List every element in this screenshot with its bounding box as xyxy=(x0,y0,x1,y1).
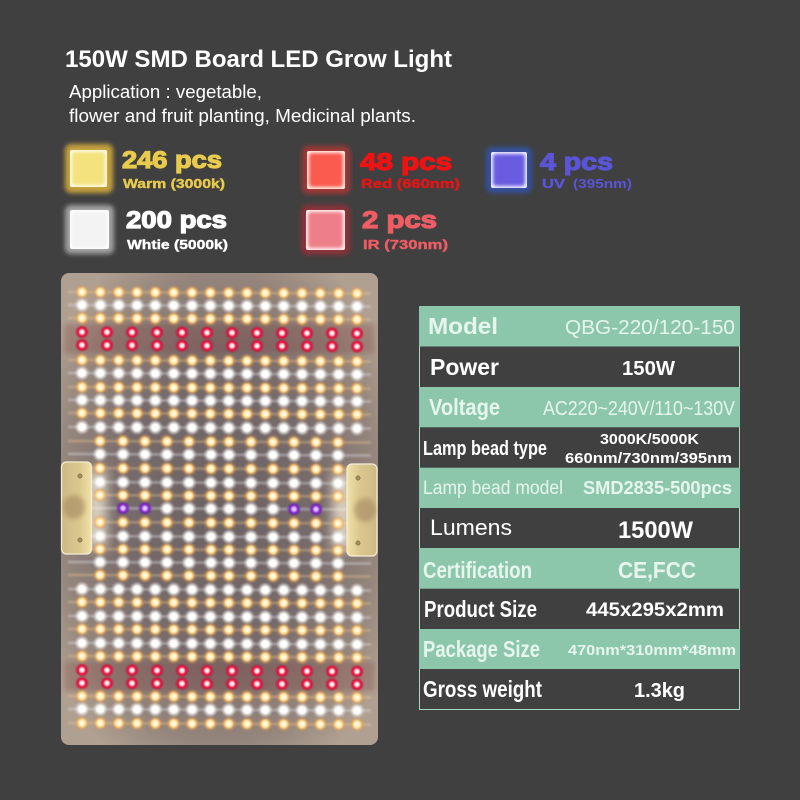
legend item: warm: 246 pcs xyxy=(122,147,222,174)
legend item: UV: (395nm) xyxy=(573,176,632,191)
row: voltage: Voltage xyxy=(429,394,500,420)
legend item: red: Red (660nm) xyxy=(361,176,460,191)
row: gross weight xyxy=(423,676,685,702)
row: lamp bead model: SMD2835-500pcs xyxy=(583,478,732,498)
row: model: Model xyxy=(428,313,498,339)
warm LEDs: bottom band xyxy=(74,594,365,732)
row light streaks xyxy=(68,291,371,726)
row: lamp bead type xyxy=(423,431,732,467)
row: package size xyxy=(423,636,736,662)
row: lumens: 1500W xyxy=(618,517,693,544)
table rows background xyxy=(419,306,740,710)
row: certification xyxy=(423,557,696,583)
application text: Application : vegetable, xyxy=(69,82,262,102)
red zones xyxy=(64,324,375,691)
row: gross weight: 1.3kg xyxy=(634,680,685,702)
application text xyxy=(69,82,416,126)
LED grid xyxy=(74,284,365,732)
UV LEDs xyxy=(116,501,323,516)
left handle bracket xyxy=(62,462,92,554)
row: lumens: Lumens xyxy=(430,515,512,540)
row: lumens xyxy=(430,515,693,544)
application text: flower and fruit planting, Medicinal plants. xyxy=(69,106,416,126)
row: power: Power xyxy=(430,354,499,380)
row: model: QBG-220/120-150 xyxy=(565,317,735,339)
row: lamp bead type: 660nm/730nm/395nm xyxy=(565,450,732,467)
row: power: 150W xyxy=(622,358,675,380)
row: certification: Certification xyxy=(423,557,532,583)
white LEDs: bottom band xyxy=(74,581,365,718)
warm LEDs: top band xyxy=(74,284,365,422)
row: lamp bead type: 3000K/5000K xyxy=(600,431,699,448)
row: power xyxy=(430,354,675,380)
red LEDs: top pair xyxy=(75,325,364,353)
row: product size xyxy=(424,596,724,622)
row: voltage: AC220~240V/110~130V xyxy=(543,398,736,420)
handle glow xyxy=(88,470,351,550)
legend item: red xyxy=(302,146,460,194)
right handle bracket xyxy=(347,464,377,556)
legend item: IR: 2 pcs xyxy=(362,207,437,234)
legend item: IR xyxy=(301,205,448,255)
row: product size: Product Size xyxy=(424,596,537,622)
legend item: white xyxy=(65,205,228,254)
row: package size: 470nm*310mm*48mm xyxy=(568,642,736,659)
row: model xyxy=(428,313,735,339)
row: lamp bead type: Lamp bead type xyxy=(423,438,547,460)
legend item: warm xyxy=(65,144,225,193)
white LEDs: top band xyxy=(74,297,365,436)
legend: LED bead counts xyxy=(65,144,632,255)
row: certification: CE,FCC xyxy=(618,557,696,583)
title: 150W SMD Board LED Grow Light xyxy=(65,46,452,73)
legend item: UV: 4 pcs xyxy=(540,149,613,176)
legend item: white: Whtie (5000k) xyxy=(127,237,228,252)
warm LEDs: middle band xyxy=(92,433,346,584)
legend item: IR: IR (730nm) xyxy=(363,237,448,252)
row: lamp bead model xyxy=(423,478,732,499)
legend item: red: 48 pcs xyxy=(360,149,452,176)
legend item: warm: Warm (3000k) xyxy=(123,176,225,191)
legend item: UV: UV xyxy=(542,176,565,191)
specification table xyxy=(419,306,740,710)
row: lamp bead model: Lamp bead model xyxy=(423,478,563,499)
board panel xyxy=(61,273,378,745)
row: product size: 445x295x2mm xyxy=(586,600,724,621)
row: package size: Package Size xyxy=(423,636,540,662)
legend item: UV xyxy=(486,147,632,193)
white LEDs: middle band xyxy=(92,446,346,571)
red LEDs: bottom pair xyxy=(75,663,364,691)
row: gross weight: Gross weight xyxy=(423,676,542,702)
LED board xyxy=(61,273,378,745)
legend item: white: 200 pcs xyxy=(126,207,227,234)
row: voltage xyxy=(429,394,736,420)
